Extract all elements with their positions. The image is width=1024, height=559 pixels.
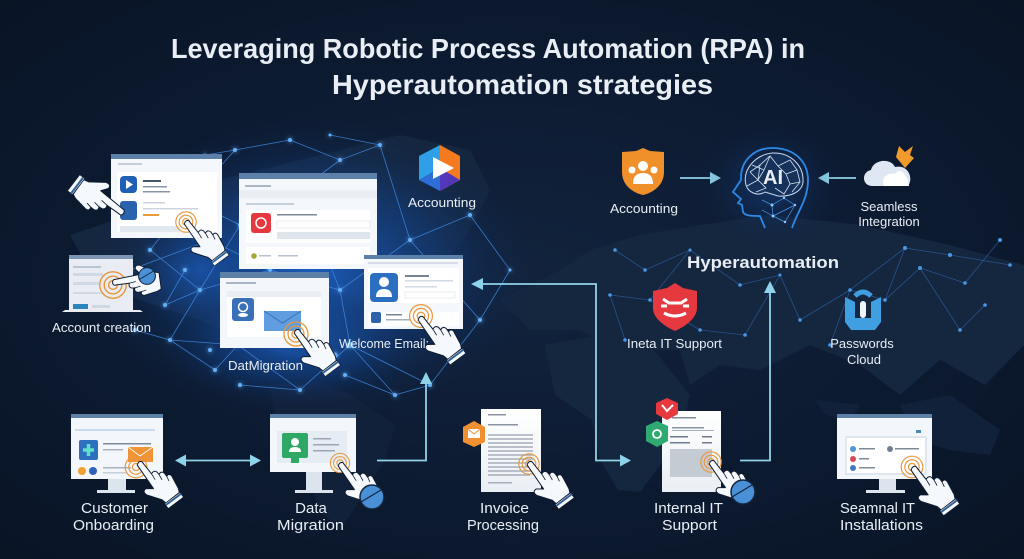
icon: orange shield [622,148,664,195]
labels: map section: Ineta IT Support [627,336,722,351]
world map [70,135,1024,530]
rings and hand: customer onboarding [125,456,184,509]
network: left [128,134,512,397]
window: welcome email [364,255,463,329]
labels: map section: Cloud [847,352,881,367]
document: invoice [481,409,541,492]
labels: map section [52,195,920,373]
labels: map section: Accounting [610,201,678,216]
rings and hand: internal IT support [701,452,755,504]
window: data migration envelope [220,272,329,348]
monitor: data migration [270,414,356,493]
labels: map section: Passwords [830,336,894,351]
icon: cloud with orange flag [864,146,914,186]
icon: blue lock cloud [845,292,881,330]
icon: orange mail badge [463,421,485,447]
labels: bottom row: Invoice [480,500,529,517]
icon: red gear shield [653,283,697,331]
title: Leveraging Robotic Process Automation (RPA) in [171,33,805,64]
labels: bottom row [73,500,923,534]
labels: map section: Welcome Email: [339,336,429,351]
network: right [608,238,1012,347]
labels: bottom row: Data [295,500,327,517]
icon: red and green badges [646,398,678,447]
network glow [85,120,535,420]
labels: bottom row: Migration [277,517,344,534]
icon: AI head: AI [763,167,783,189]
labels: bottom row: Processing [467,517,539,534]
window: central red form [239,173,377,269]
labels: bottom row: Installations [840,517,923,534]
labels: bottom row: Onboarding [73,517,154,534]
rings and hand: laptop [100,252,170,313]
labels: map section: Account creation [52,320,151,335]
title: Hyperautomation strategies [332,69,713,100]
title [171,33,805,100]
rings and hand: invoice [519,454,575,509]
labels: map section: Accounting [408,195,476,210]
labels: map section: Hyperautomation [687,253,839,272]
document: internal IT support [662,411,721,492]
rings and hand: top left window [176,212,230,266]
labels: bottom row: Internal IT [654,500,723,517]
icon: AI head [700,123,840,247]
monitor: seamnal IT installations [837,414,932,493]
rings and hand: seamnal IT installations [901,456,960,516]
window: top left app [111,154,222,238]
labels: bottom row: Customer [81,500,148,517]
icon: hexagon play logo [419,145,460,191]
labels: bottom row: Support [662,517,718,534]
labels: map section: Integration [858,214,920,229]
labels: map section: DatMigration [228,358,303,373]
rings and hand: welcome email [410,305,467,365]
labels: map section: Seamless [860,199,918,214]
connector arrows [175,172,856,466]
monitor: customer onboarding [71,414,163,493]
window: laptop account creation [62,255,143,312]
labels: bottom row: Seamnal IT [840,500,915,517]
rings and hand: data migration [330,453,384,509]
hand: top left [63,165,127,231]
rings and hand: data migration window [284,322,341,377]
